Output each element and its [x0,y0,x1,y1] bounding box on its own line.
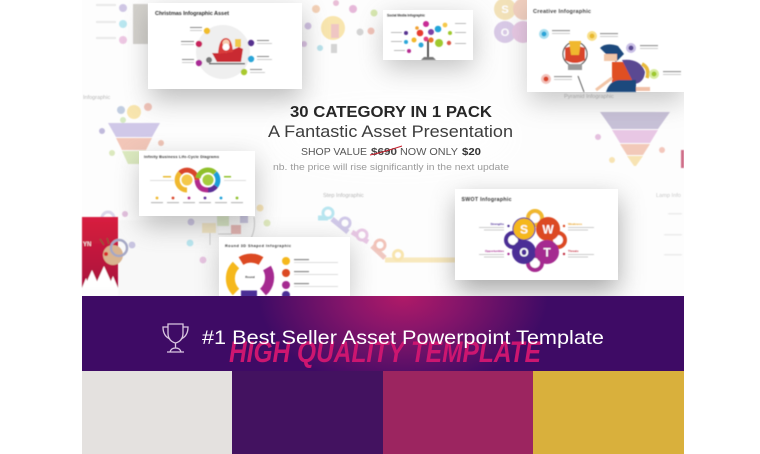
callout: strengths: Strengths [490,222,504,226]
subheading: A Fantastic Asset Presentation [268,123,513,141]
background panel [82,0,684,296]
faint slide: funnel infographic: Infographic [83,95,110,101]
price line [301,146,481,158]
icon: infinity loop [177,170,218,190]
slide title: Creative Infographic [533,9,591,15]
swatch: purple [232,371,383,454]
SWOT flower: W [542,222,554,236]
faint slide: light bulb icons [301,0,378,53]
icon: student with backpack [596,44,650,92]
banner title: #1 Best Seller Asset Powerpoint Template [202,327,604,349]
banner [82,296,684,371]
swatch: light grey [82,371,232,454]
icon: reindeer [100,238,127,265]
icon: tree [412,21,451,60]
faint slide: step infographic: Step Infographic [323,193,364,199]
callout: opportunities: Opportunities [485,249,504,253]
icon: trophy badge [563,41,587,92]
slide: SWOT Infographic [455,189,618,291]
callout dots [391,23,466,53]
slide title: SWOT Infographic [462,197,512,203]
faint background slides [83,0,684,264]
faint slide: SWOT circles [494,0,527,44]
slide title: Christmas Infographic Asset [155,11,229,17]
SWOT flower: S [520,222,528,236]
faint slide: pyramid infographic: Pyramid Infographic [564,94,614,100]
icon: Santa on sleigh [206,38,245,64]
slide: Social Media Infographic [383,10,473,68]
slide: Christmas Infographic Asset [148,3,302,100]
price line: $690 [371,146,397,158]
faint slide: step infographic [256,193,455,260]
faint slide: SWOT circles: O [501,27,510,39]
slide: Creative Infographic [527,0,684,102]
faint slide: lamp infographic [656,193,682,256]
icon: pine trees [82,266,118,288]
slide title: Social Media Infographic [387,14,425,18]
faint slide: funnel infographic [83,95,164,164]
icon: trophy [163,324,188,352]
headline block [268,104,513,173]
price line: NOW ONLY [400,146,458,158]
callout: threats: Threats [568,249,579,253]
faint slide: lamp infographic: Lamp Info [656,193,681,199]
swatch: magenta [383,371,533,454]
callout labels [150,176,246,203]
colour swatches [82,371,684,454]
heading: 30 category in 1 pack: 30 CATEGORY IN 1 PACK [290,104,493,121]
faint slide: pyramid infographic [564,94,684,168]
slide: red Christmas fragment: YN [83,242,91,248]
slide: red Christmas fragment [82,217,127,288]
callout: weakness: Weakness [568,222,582,226]
price line: $20 [462,146,481,158]
infographic canvas [81,0,684,454]
price line: SHOP VALUE [301,146,367,158]
SWOT flower [506,211,565,270]
slide title: Round 3D Shaped Infographic [225,244,291,248]
faint slide: SWOT circles: S [501,4,509,16]
slide title: Infinity Business Life-Cycle Diagrams [144,154,219,159]
slide: Infinity Business Life-Cycle Diagram [139,151,255,226]
script tagline: HIGH QUALITY TEMPLATE [229,336,542,369]
callout icons [539,29,681,84]
callout dots [181,27,272,75]
slide: Round 3D Shaped Infographic [219,237,350,304]
list icons [282,257,338,299]
SWOT flower: T [543,246,551,260]
faint slide: top left list [96,4,148,44]
SWOT flower: O [519,246,529,260]
faint slide: gear and process [100,210,256,264]
donut label: Round [245,275,255,279]
note: nb. the price will rise significantly in the next update [273,162,509,173]
white glow behind headline [274,107,510,167]
donut chart [230,258,270,295]
swatch: gold [533,371,684,454]
